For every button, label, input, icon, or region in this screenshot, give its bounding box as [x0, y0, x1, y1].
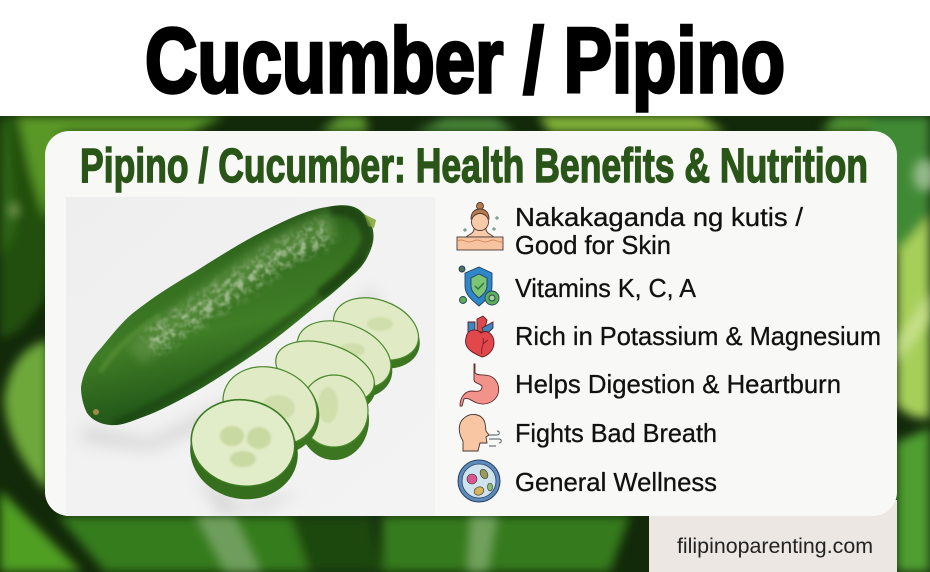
slice 5	[296, 320, 392, 396]
text: skin benefit: Good for Skin	[515, 230, 671, 260]
slice 2	[222, 366, 320, 450]
sliced cucumber pieces	[190, 297, 420, 500]
benefit: skin	[457, 202, 804, 260]
background: cucumber photo	[0, 116, 930, 572]
slice 4	[275, 340, 376, 404]
text: vitamins: Vitamins K, C, A	[515, 273, 697, 303]
text: digestion: Helps Digestion & Heartburn	[515, 369, 841, 399]
slice 1	[190, 398, 298, 500]
text: breath: Fights Bad Breath	[515, 418, 717, 448]
benefit: digestion	[460, 364, 841, 406]
text: skin benefit	[515, 202, 804, 260]
benefit: breath	[459, 414, 717, 451]
skin highlight	[135, 224, 335, 355]
benefit: wellness	[458, 460, 717, 502]
benefit: vitamins	[459, 266, 697, 306]
icon: skin	[457, 202, 503, 250]
slice 3	[299, 375, 369, 460]
icon: breath	[459, 414, 501, 451]
shadows	[80, 290, 380, 514]
footer tab	[649, 500, 897, 572]
benefits list	[457, 202, 881, 502]
cucumber photo	[66, 197, 435, 516]
slice 6	[332, 297, 420, 368]
text: skin benefit: Nakakaganda ng kutis /	[515, 202, 804, 232]
water droplet sheen	[150, 232, 328, 345]
icon: microbes in dish	[458, 460, 500, 502]
footer website: filipinoparenting.com	[677, 535, 873, 558]
text: wellness: General Wellness	[515, 467, 717, 497]
benefit: potassium and magnesium	[466, 316, 881, 357]
icon: shield	[459, 266, 499, 306]
whole cucumber	[81, 205, 376, 425]
icon: heart	[466, 316, 494, 357]
title band	[0, 0, 930, 116]
icon: stomach	[460, 364, 499, 406]
text: potassium: Rich in Potassium & Magnesium	[515, 321, 881, 351]
main panel	[45, 131, 897, 516]
